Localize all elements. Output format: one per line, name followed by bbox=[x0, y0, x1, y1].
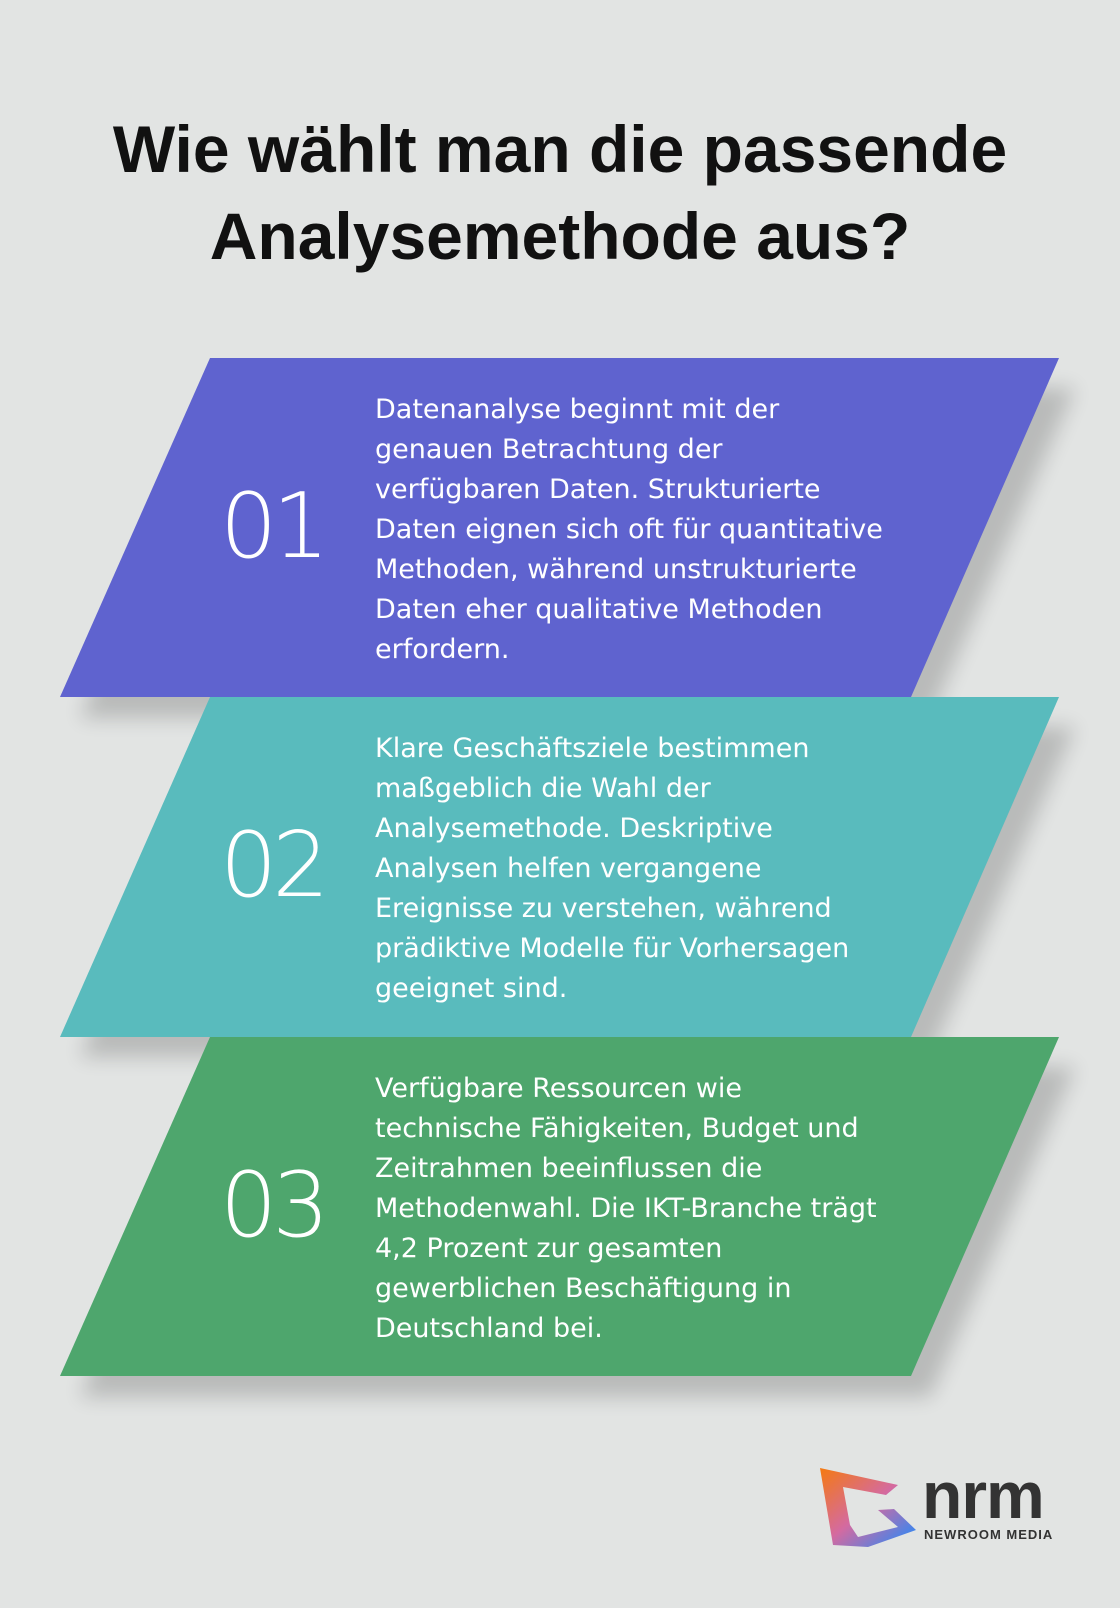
text 01: verfügbaren Daten. Strukturierte bbox=[375, 474, 821, 505]
text 02: Klare Geschäftsziele bestimmen bbox=[375, 733, 809, 764]
panel: 03 bbox=[60, 1037, 1078, 1406]
text 01: genauen Betrachtung der bbox=[375, 434, 723, 465]
text 03: 4,2 Prozent zur gesamten bbox=[375, 1233, 722, 1264]
text 03: Methodenwahl. Die IKT-Branche trägt bbox=[375, 1193, 877, 1224]
logo bbox=[820, 1458, 1053, 1547]
number 02: 02 bbox=[220, 813, 325, 918]
text 01 bbox=[375, 394, 883, 665]
title bbox=[113, 112, 1007, 273]
text 01: erfordern. bbox=[375, 634, 509, 665]
text 03: technische Fähigkeiten, Budget und bbox=[375, 1113, 859, 1144]
number 01: 01 bbox=[220, 474, 325, 579]
title: Analysemethode aus? bbox=[210, 199, 910, 273]
text 01: Daten eher qualitative Methoden bbox=[375, 594, 822, 625]
text 03: Verfügbare Ressourcen wie bbox=[375, 1073, 742, 1104]
text 02: Ereignisse zu verstehen, während bbox=[375, 893, 832, 924]
panel: 01 bbox=[60, 358, 1078, 726]
text 01: Datenanalyse beginnt mit der bbox=[375, 394, 779, 425]
text 02: Analysemethode. Deskriptive bbox=[375, 813, 773, 844]
text 03: gewerblichen Beschäftigung in bbox=[375, 1273, 791, 1304]
text 03: Deutschland bei. bbox=[375, 1313, 603, 1344]
panel: 02 bbox=[60, 697, 1078, 1066]
text 02 bbox=[375, 733, 849, 1004]
text 01: Methoden, während unstrukturierte bbox=[375, 554, 857, 585]
text 01: Daten eignen sich oft für quantitative bbox=[375, 514, 883, 545]
logo: NEWROOM MEDIA bbox=[924, 1527, 1053, 1542]
logo: nrm bbox=[922, 1458, 1044, 1532]
text 02: geeignet sind. bbox=[375, 973, 567, 1004]
text 02: prädiktive Modelle für Vorhersagen bbox=[375, 933, 849, 964]
text 03 bbox=[375, 1073, 877, 1344]
text 02: maßgeblich die Wahl der bbox=[375, 773, 711, 804]
text 03: Zeitrahmen beeinflussen die bbox=[375, 1153, 762, 1184]
number 03: 03 bbox=[220, 1153, 325, 1258]
text 02: Analysen helfen vergangene bbox=[375, 853, 762, 884]
title: Wie wählt man die passende bbox=[113, 112, 1007, 186]
